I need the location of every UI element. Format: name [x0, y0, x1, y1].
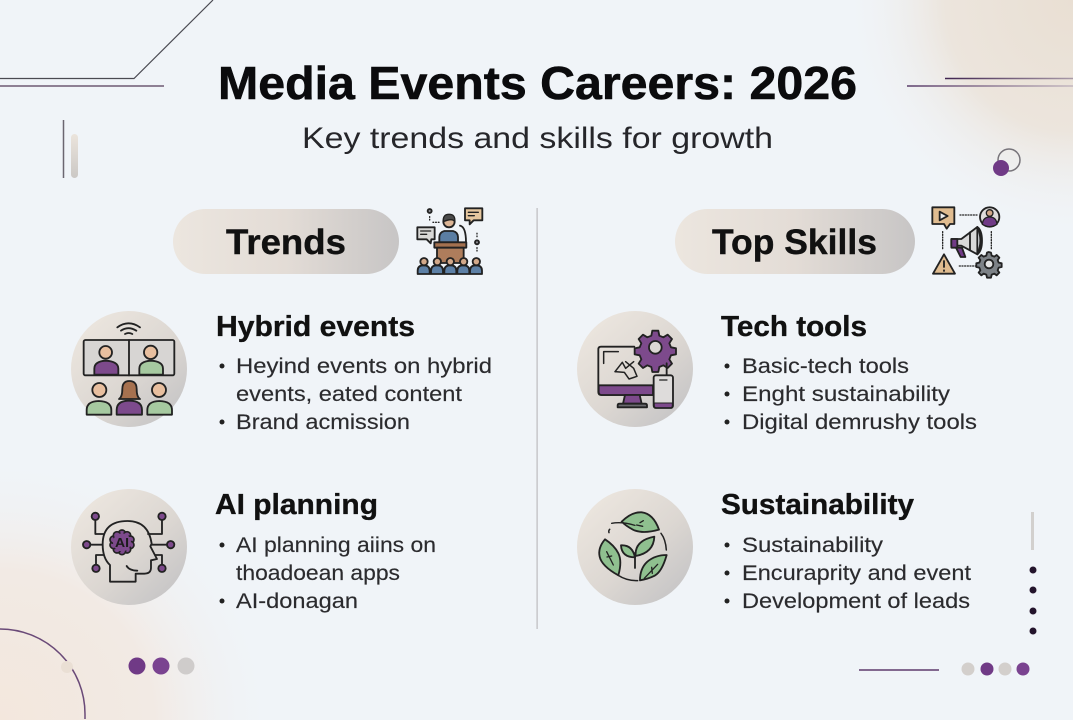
panel: tech tools: [577, 311, 977, 434]
panel: top skills heading pill: [675, 209, 915, 274]
title: Media Events Careers: 2026: [218, 57, 857, 109]
decoration: bottom-left arc and dots: [0, 629, 194, 719]
panel: sustainability: [577, 489, 971, 613]
icon: monitor, gear, phone: [577, 311, 693, 427]
panel: AI planning: [71, 489, 436, 613]
panel: top skills heading pill: Top Skills: [712, 223, 877, 262]
bullet list: hybrid events: events, eated content: [236, 382, 462, 406]
bullet list: hybrid events: Heyind events on hybrid: [236, 354, 492, 378]
icon: megaphone network: [932, 207, 1002, 278]
heading: sustainability: Sustainability: [721, 489, 914, 521]
heading: tech tools: Tech tools: [721, 311, 867, 343]
icon: AI head: AI: [115, 535, 129, 550]
decoration: bottom-right line and dots: [859, 512, 1036, 676]
bullet list: tech tools: [724, 354, 977, 434]
bullet list: sustainability: Sustainability: [742, 533, 883, 557]
panel: hybrid events: [71, 311, 492, 434]
bullet list: tech tools: Basic-tech tools: [742, 354, 909, 378]
icon: AI head: [71, 489, 187, 605]
bullet list: AI planning: AI planning aiins on: [236, 533, 436, 557]
bullet list: AI planning: AI-donagan: [236, 589, 358, 613]
subtitle: Key trends and skills for growth: [302, 122, 773, 155]
bullet list: sustainability: Development of leads: [742, 589, 970, 613]
heading: AI planning: AI planning: [215, 489, 378, 521]
panel: trends heading pill: [173, 209, 399, 274]
icon: speaker at podium with audience: [417, 208, 482, 274]
bullet list: AI planning: thoadoean apps: [236, 561, 400, 585]
bullet list: sustainability: [724, 533, 971, 613]
bullet list: tech tools: Digital demrushy tools: [742, 410, 977, 434]
icon: recycling leaves: [577, 489, 693, 605]
bullet list: hybrid events: Brand acmission: [236, 410, 410, 434]
icon: hybrid meeting: [71, 311, 187, 427]
decoration: top-left lines: [0, 0, 213, 178]
decoration: top-right lines and circles: [907, 78, 1073, 176]
panel: trends heading pill: Trends: [226, 223, 346, 262]
center divider: [536, 208, 538, 629]
heading: hybrid events: Hybrid events: [216, 311, 415, 343]
bullet list: tech tools: Enght sustainability: [742, 382, 950, 406]
bullet list: hybrid events: [220, 354, 492, 434]
bullet list: sustainability: Encuraprity and event: [742, 561, 971, 585]
bullet list: AI planning: [220, 533, 436, 613]
